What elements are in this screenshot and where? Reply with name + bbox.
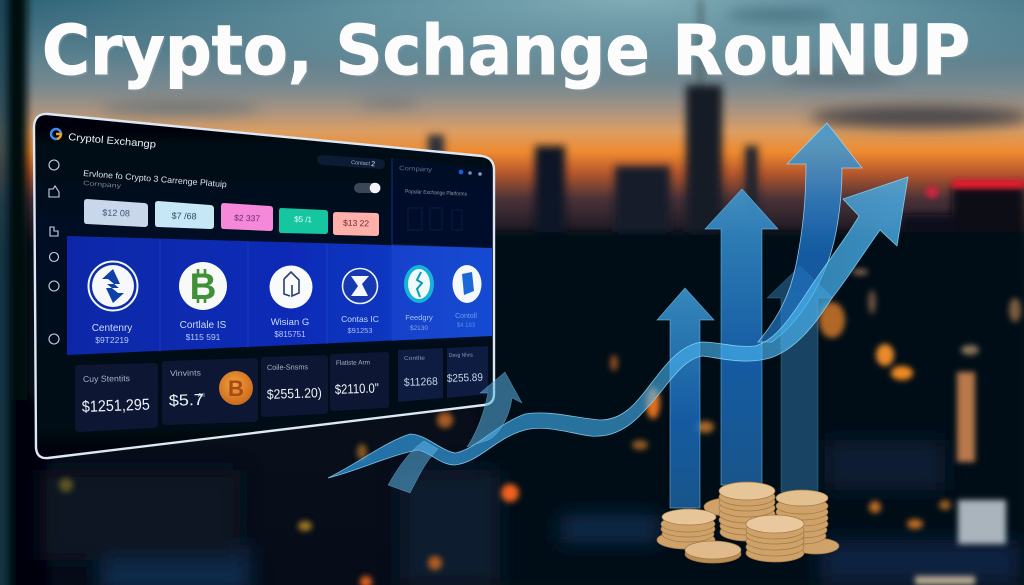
toggle — [354, 183, 381, 193]
price cards: $13 22 — [343, 218, 369, 228]
window title: Cryptol Exchangp — [68, 132, 157, 151]
label: Centenry — [92, 323, 132, 345]
coin: loose — [685, 545, 741, 563]
arrow: curved top — [758, 123, 862, 342]
stat card 6: Desg Nhns — [449, 353, 473, 359]
label: Cortlale IS: $115 591 — [186, 332, 221, 342]
search pill: Contact — [351, 160, 371, 167]
label: Contoll — [455, 313, 477, 329]
label: Cortlale IS: Cortlale IS — [180, 320, 227, 331]
arrow: short right — [767, 266, 833, 492]
stat card 4: Flatiste Arm — [336, 359, 370, 367]
label: Contas IC: Contas IC — [341, 314, 379, 324]
label: Feedgry: Feedgry — [405, 313, 433, 322]
right column header: Popular Exchange Platforms — [405, 189, 467, 198]
coin stack: front — [746, 515, 804, 562]
arrow: diagonal with trend ribbon — [328, 177, 908, 478]
right column header: Cornpany — [399, 165, 433, 174]
label: Cortlale IS — [180, 320, 227, 342]
arrow: small near panel — [388, 372, 522, 493]
label: Contoll: $4 183 — [457, 323, 476, 329]
coin: Centenry — [88, 262, 138, 310]
icon: bitcoin coin: B — [228, 376, 244, 401]
stat card 1: $1251,295 — [82, 397, 150, 416]
label: Wisian G: $815751 — [274, 330, 306, 339]
stat card 4 — [330, 352, 389, 411]
label: Feedgry — [405, 313, 433, 332]
right column header — [392, 158, 492, 248]
coin: Cortlale IS — [179, 262, 227, 310]
stat card 3: Coile-Snsms — [267, 362, 308, 372]
stat card 3 — [261, 355, 328, 417]
stat card 2: A/I — [198, 393, 205, 399]
label: Contas IC — [341, 314, 379, 335]
coin stack: right — [776, 490, 839, 554]
label: Contas IC: $91253 — [347, 326, 373, 335]
sidebar — [49, 160, 59, 344]
heading: Ervlone fo Crypto 3 Carrenge Platuip — [83, 168, 227, 189]
stat card 1 — [75, 363, 158, 432]
stat card 2 — [162, 358, 258, 425]
stat card 6: $255.89 — [447, 372, 483, 385]
stat card 2: $5.7 — [169, 392, 204, 410]
coin: Feedgry — [404, 265, 434, 303]
coin: Cortlale IS: B — [190, 266, 216, 307]
coin stack: left — [657, 509, 716, 549]
icon: stack of gold coins — [657, 482, 839, 563]
price cards: $12 08 — [102, 208, 130, 218]
coin: Contas IC — [342, 268, 378, 304]
stat card 5 — [398, 348, 443, 402]
chart: rising arrows — [328, 123, 908, 508]
label: Wisian G: Wisian G — [271, 317, 309, 328]
label: Centenry: Centenry — [92, 323, 132, 334]
stat card 5: Contlte — [404, 356, 425, 362]
search pill: 2 — [371, 161, 375, 168]
stat card 6 — [447, 346, 488, 398]
price cards: $5 /1 — [294, 215, 313, 224]
coin: Contoll — [452, 265, 482, 303]
coin stack: back tall — [704, 482, 775, 541]
stat card 4: $2110.0" — [335, 380, 379, 397]
price cards — [84, 199, 379, 236]
label: Wisian G — [271, 317, 309, 339]
stat card 3: $2551.20) — [267, 385, 322, 402]
title: Crypto, Schange RouNUP — [44, 13, 972, 93]
arrow: short left — [657, 288, 714, 508]
search pill — [317, 155, 385, 169]
logo — [51, 129, 61, 139]
price cards: $7 /68 — [171, 211, 197, 221]
subheading: Cornpany — [83, 180, 122, 190]
price cards: $2 337 — [234, 213, 261, 223]
label: Centenry: $9T2219 — [95, 335, 129, 345]
stat card 2: Vinvints — [170, 368, 201, 378]
title: Crypto, Schange RouNUP — [42, 11, 970, 91]
blue exchange band — [67, 236, 492, 355]
coin: Wisian G — [270, 266, 312, 308]
label: Feedgry: $2130 — [410, 325, 428, 332]
stat card 5: $11268 — [404, 376, 438, 389]
panel frame — [34, 114, 494, 458]
arrow: tall middle — [705, 189, 778, 485]
stat card 1: Cuy Stentits — [83, 373, 130, 384]
label: Contoll: Contoll — [455, 313, 477, 320]
panel: dashboard window — [34, 114, 494, 458]
